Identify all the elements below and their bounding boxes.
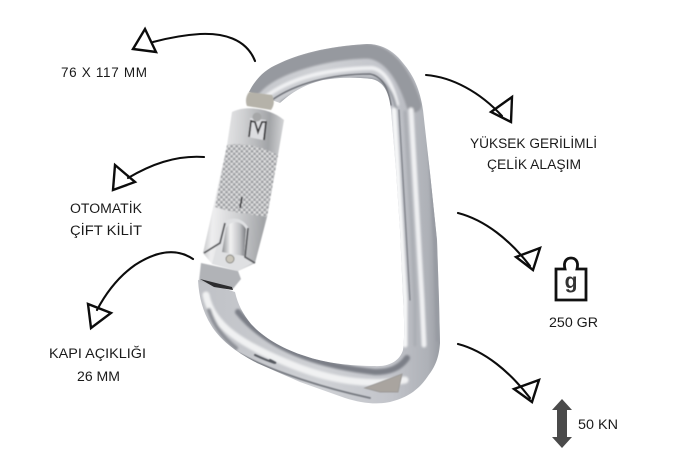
top collar xyxy=(246,92,274,110)
icon: double arrow xyxy=(552,399,572,448)
arrow: dimensions xyxy=(133,29,255,61)
label: double lock: ÇİFT KİLİT xyxy=(70,223,142,238)
bottom hinge xyxy=(199,263,241,290)
gate sleeve xyxy=(203,108,284,271)
lower latch xyxy=(212,218,253,271)
knurled grip xyxy=(215,144,278,217)
sleeve slot xyxy=(240,197,242,208)
carabiner xyxy=(198,44,440,403)
carabiner frame xyxy=(198,44,440,403)
icon: weight: g xyxy=(565,270,577,293)
label: strength: 50 KN xyxy=(578,417,618,432)
label: gate opening value: 26 MM xyxy=(77,369,120,384)
label: material line 1: YÜKSEK GERİLİMLİ xyxy=(470,136,597,151)
label: automatic lock: OTOMATİK xyxy=(70,201,142,216)
arrow: material xyxy=(426,75,512,122)
upper latch slot xyxy=(248,118,266,140)
arrow: automatic lock xyxy=(113,157,204,190)
arrow: strength xyxy=(458,344,539,402)
icon: weight xyxy=(556,258,586,300)
label: gate opening: KAPI AÇIKLIĞI xyxy=(49,346,146,361)
label: material line 2: ÇELİK ALAŞIM xyxy=(487,157,581,172)
arrow: weight xyxy=(458,213,540,270)
arrow: gate opening xyxy=(88,252,193,328)
label: weight: 250 GR xyxy=(549,315,598,330)
label: dimensions: 76 X 117 MM xyxy=(61,65,147,80)
